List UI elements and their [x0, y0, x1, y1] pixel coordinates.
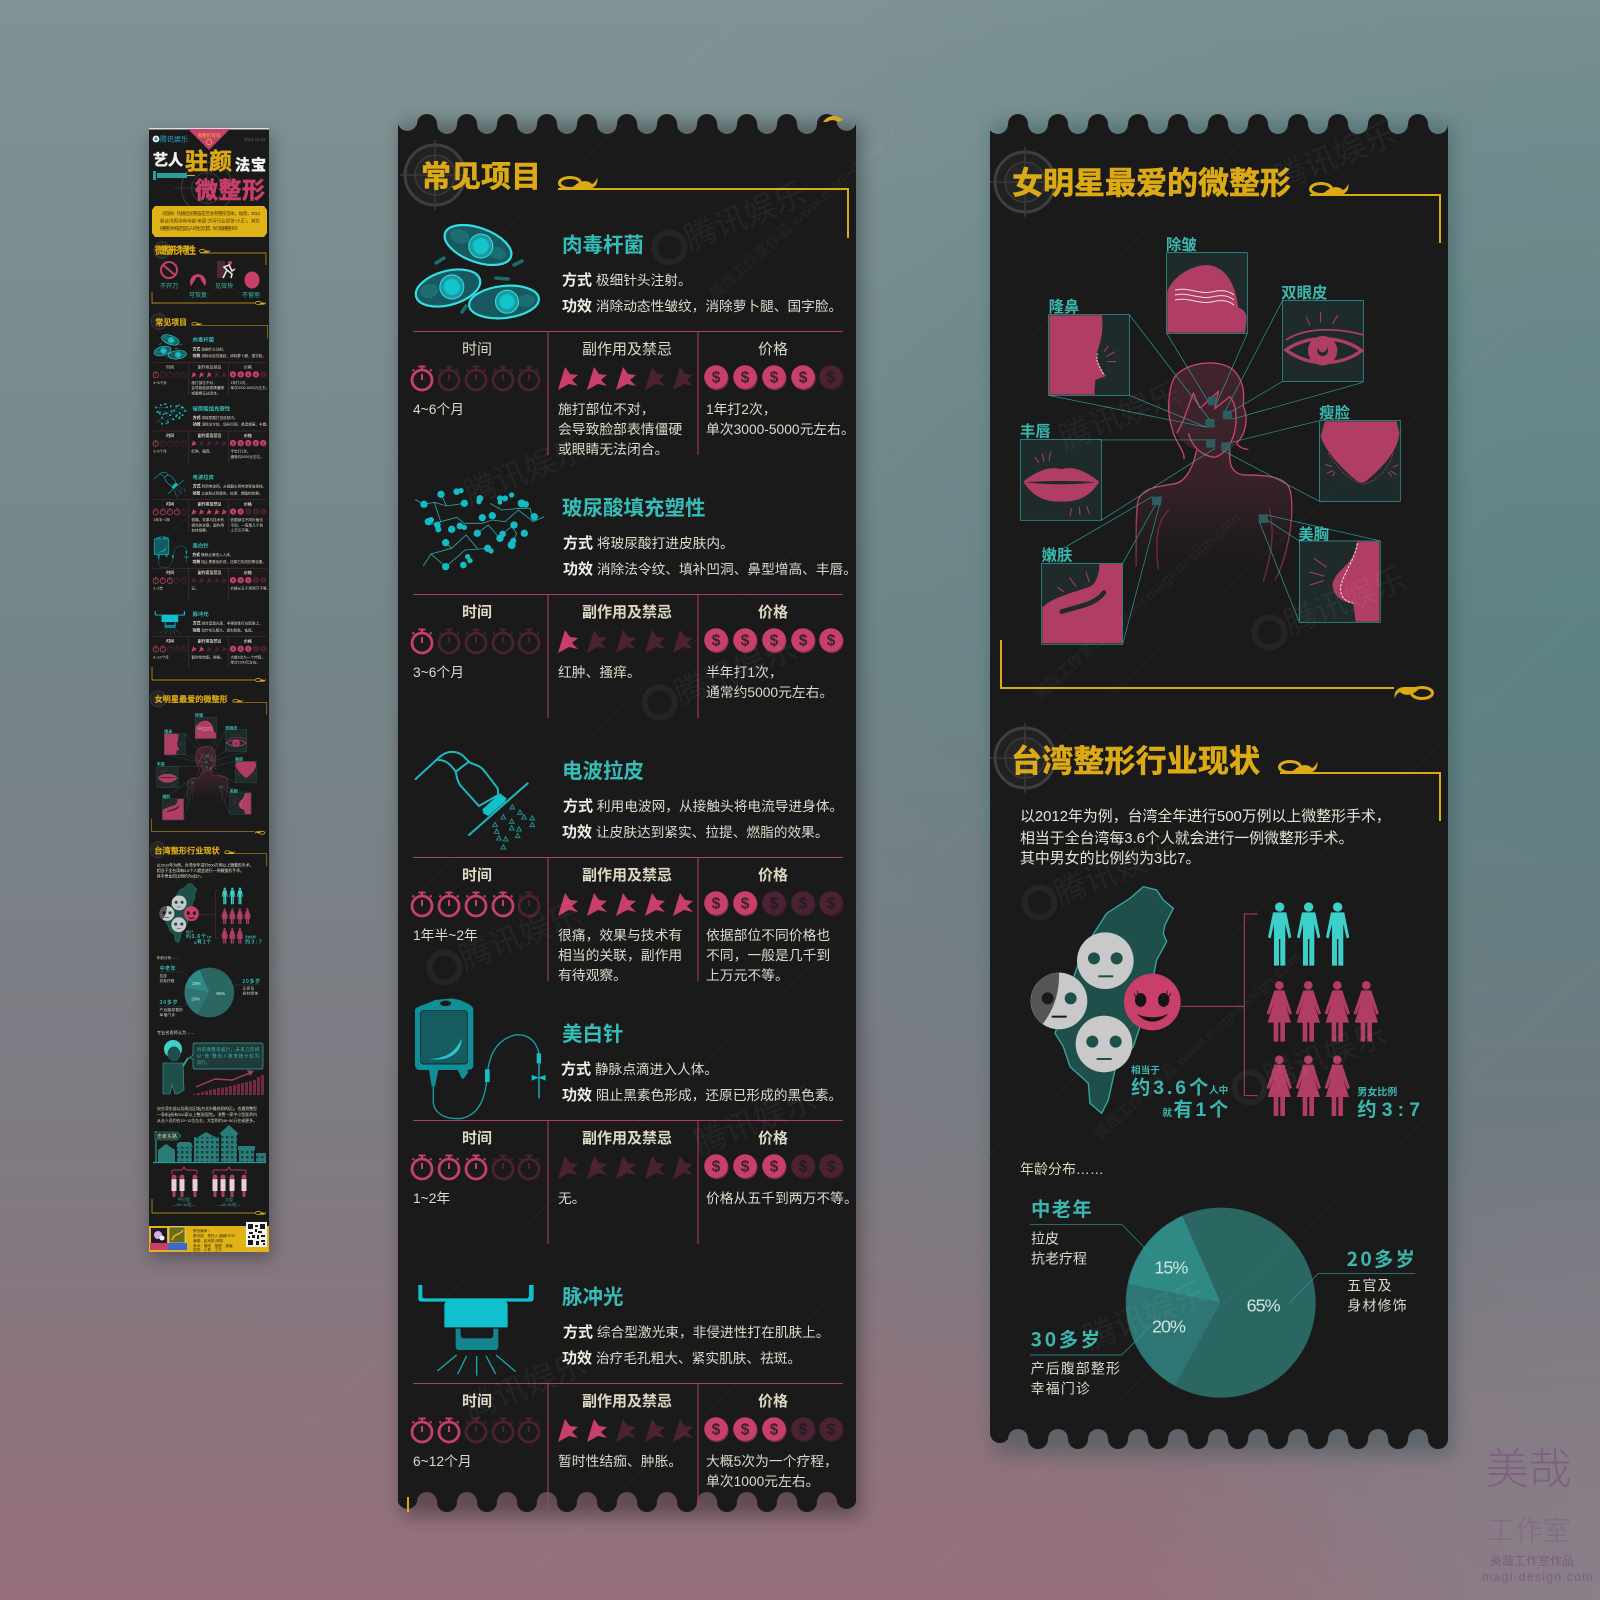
top-right ornament fragment: [823, 116, 843, 122]
rating table: 副作用及禁忌: [582, 1130, 672, 1147]
men row: [1268, 902, 1349, 966]
icon: radio wave handpiece: [416, 752, 535, 849]
heading: common treatments: 常见项目: [421, 152, 541, 196]
method and effect: 方式 将玻尿酸打进皮肤内。: [563, 534, 734, 552]
paragraph: [157, 1105, 257, 1123]
icon: no scar: 不留疤: [242, 291, 260, 299]
doctors groups: [172, 1167, 246, 1207]
face: neutral top: [1077, 932, 1134, 989]
intro box: [152, 206, 267, 237]
callout: wrinkles: 除皱: [1166, 233, 1197, 255]
icon: quick runner: [215, 261, 235, 290]
intro box: 新台湾再没有半路“美丽”方可行业更张“小王”。其实: [160, 218, 260, 224]
logo: 腾讯娱乐: [160, 134, 188, 144]
watermarks: 腾讯娱乐: [689, 1080, 821, 1161]
label: older: [1030, 1194, 1152, 1266]
heading: taiwan status: 台湾整形行业现状: [1011, 736, 1260, 781]
panel shadows: [151, 124, 1452, 1516]
callout: breast: 美胸: [1298, 522, 1329, 544]
rating table: 价格: [758, 1129, 788, 1147]
closing frame: features: [152, 292, 266, 305]
rating table: 时间: [462, 1130, 492, 1147]
stat: ratio: 男女比例: [1357, 1085, 1397, 1098]
callout: lips: [1020, 420, 1101, 520]
table rules: [413, 594, 843, 718]
doctors groups: 中小型: [178, 1196, 190, 1202]
main title: 微整形: [195, 171, 265, 205]
watermarks: 腾讯娱乐: [1054, 375, 1186, 456]
rating table: 时间: [462, 867, 492, 884]
rating table: 施打部位不对，: [558, 401, 655, 417]
rating table: 时间: [462, 341, 492, 358]
treatment: whitening injection: [412, 998, 858, 1244]
icon: no knife: [160, 262, 178, 290]
taiwan map and ratio: [1031, 887, 1420, 1121]
callout: skin rejuvenation: [1042, 544, 1123, 644]
watermarks: 腾讯娱乐: [1049, 830, 1181, 911]
women rows: [1267, 981, 1379, 1116]
rating table: 副作用及禁忌: [582, 604, 672, 621]
rating table: 通常约5000元左右。: [706, 685, 833, 700]
main title: 驻颜: [185, 142, 232, 176]
label: thirties: [1030, 1325, 1152, 1396]
rating table: 价格: [758, 1392, 788, 1410]
town illustration: [153, 1125, 266, 1162]
callout: skin rejuvenation: 嫩肤: [1042, 544, 1073, 566]
pie chart: 65%: [1247, 1295, 1281, 1315]
label: twenties: 五官及: [1347, 1278, 1392, 1294]
footer: 策划组 责任人 编辑ITEM: [193, 1233, 235, 1238]
panel: thumbnail long view: [149, 128, 270, 1252]
pie chart: 15%: [1154, 1257, 1188, 1277]
table rules: [413, 858, 843, 981]
method and effect: 方式 综合型激光束，非侵进性打在肌肤上。: [563, 1323, 830, 1341]
callout: double eyelid: [1281, 281, 1363, 381]
face: neutral bottom: [1076, 1016, 1132, 1072]
section heading: features: 微整形特性: [155, 242, 196, 257]
rating table: 上万元不等。: [706, 967, 789, 983]
face: half shaded: [1031, 973, 1087, 1029]
intro paragraph: [1020, 807, 1391, 867]
label: twenties: 身材修饰: [1347, 1298, 1407, 1314]
bottom frame fragment: [407, 1497, 409, 1512]
method and effect: 功效 治疗毛孔粗大、紧实肌肤、祛斑。: [562, 1349, 801, 1367]
rating table: 单次3000-5000元左右。: [706, 422, 855, 437]
chart: rising bars: [193, 1070, 264, 1095]
treatment: intense pulsed light: [412, 1280, 844, 1507]
callout: wrinkles: [1166, 233, 1247, 333]
doctors groups: —40~50位—: [217, 1201, 241, 1207]
intro paragraph: 以2012年为例，台湾全年进行500万例以上微整形手术，: [1020, 807, 1391, 825]
method and effect: 方式 极细针头注射。: [562, 271, 692, 289]
rating table: 很痛，效果与技术有: [558, 927, 682, 943]
rating table: 价格: [758, 341, 788, 358]
heading: common treatments: [400, 140, 848, 238]
rating table: 副作用及禁忌: [582, 341, 672, 358]
speech bubble: [189, 1043, 263, 1069]
speech bubble: 目前微整形盛行，未来几年将: [197, 1046, 260, 1053]
age heading: 年龄分布……: [1020, 1161, 1104, 1177]
studio signature: [1482, 1446, 1594, 1584]
icon: doctor: [163, 1040, 188, 1094]
rating table: 1年半~2年: [413, 928, 478, 943]
watermarks: 美哉工作室作品 www.magi-design.com: [1031, 508, 1244, 703]
footer: [149, 1222, 269, 1252]
method and effect: 功效 消除动态性皱纹，消除萝卜腿、国字脸。: [562, 297, 842, 315]
icon: recoverable: [189, 274, 207, 299]
doctors groups: 大型: [225, 1196, 233, 1202]
rating table: 1年打2次，: [706, 401, 777, 417]
rating table: 或眼睛无法闭合。: [558, 442, 668, 457]
method and effect: [561, 1060, 842, 1104]
icon: bacteria: [412, 217, 540, 322]
callout: lips: 丰唇: [1020, 420, 1051, 442]
item title: 电波拉皮: [562, 754, 644, 784]
face: smiling woman: [1124, 974, 1181, 1030]
stat: one in 3.6: 有1个: [1173, 1099, 1228, 1121]
stat: ratio: 约3:7: [1357, 1099, 1420, 1121]
watermarks: 腾讯娱乐: [459, 430, 591, 511]
item title: 美白针: [562, 1017, 624, 1047]
rating table: 单次1000元左右。: [706, 1474, 819, 1489]
icon: IV bag: [415, 998, 546, 1119]
stat: one in 3.6: 相当于: [1131, 1064, 1160, 1076]
studio signature: 美哉工作室作品: [1490, 1554, 1574, 1568]
rating table: 3~6个月: [413, 665, 464, 680]
method and effect: 功效 消除法令纹、填补凹洞、鼻型增高、丰唇。: [563, 560, 857, 578]
method and effect: 功效 阻止黑素色形成，还原已形成的黑色素。: [562, 1086, 842, 1104]
map of taiwan: [1055, 887, 1173, 1113]
paragraph: 仅台湾东部以及周边区域(台北市最热闹的区)，也遇到整型: [157, 1105, 257, 1111]
right panel contents: [990, 147, 1440, 1398]
watermarks: 美哉工作室作品 www.magi-design.com: [706, 108, 919, 303]
icon: no scar: [242, 272, 260, 299]
paragraph: 一条街(街有300家以上整形医院)，消费一家中小型医师内: [157, 1111, 257, 1117]
rating table: 暂时性结痂、肿胀。: [558, 1454, 682, 1469]
thumbnail: common treatments: [150, 313, 270, 669]
stat: ratio: [1357, 1085, 1420, 1121]
rating table: 时间: [462, 1393, 492, 1410]
rating table: 有待观察。: [558, 967, 627, 983]
watermarks: 腾讯娱乐: [459, 1345, 591, 1426]
footer: 策划编审：: [193, 1228, 211, 1233]
method and effect: [562, 271, 842, 315]
rating table: 时间: [462, 604, 492, 621]
watermarks: 美哉工作室作品 www.magi-design.com: [1091, 948, 1304, 1143]
watermarks: 腾讯娱乐: [679, 175, 811, 256]
heading: favourite procedures: 女明星最爱的微整形: [1012, 158, 1291, 203]
method and effect: 功效 让皮肤达到紧实、拉提、燃脂的效果。: [562, 823, 829, 841]
highlight squares: [1152, 397, 1268, 523]
section heading: features: [154, 242, 266, 265]
heading: taiwan status: [990, 723, 1440, 821]
panel: common treatments (tall ticket): [398, 114, 858, 1512]
icon: quick runner: 见效快: [215, 282, 233, 290]
callout: slim face: [1319, 401, 1400, 501]
rating table: 会导致脸部表情僵硬: [558, 422, 682, 437]
rating table: 4~6个月: [413, 402, 464, 417]
stat: one in 3.6: 约3.6个: [1131, 1077, 1208, 1099]
rating table: [412, 1392, 844, 1489]
rating table: 相当的关联，副作用: [558, 948, 682, 963]
town illustration: 忠孝东路: [157, 1133, 177, 1140]
item title: 玻尿酸填充塑性: [562, 491, 706, 521]
intro paragraph: 其中男女的比例约为3比7。: [1020, 849, 1200, 867]
pink top tag: 微整形资讯: [198, 132, 221, 139]
rating table: [412, 341, 855, 457]
intro paragraph: 相当于全台湾每3.6个人就会进行一例微整形手术。: [1020, 829, 1353, 847]
rating table: [412, 1129, 858, 1206]
rating table: 依据部位不同价格也: [706, 928, 830, 943]
rating table: [412, 866, 844, 983]
label: thirties: 30多岁: [1031, 1325, 1100, 1353]
woman silhouette: [1136, 363, 1292, 587]
icon: IPL device: [418, 1285, 534, 1376]
table rules: [413, 1120, 843, 1244]
panel: favourite procedures and taiwan status: [990, 114, 1448, 1449]
rating table: 价格: [758, 866, 788, 884]
main title: 艺人: [153, 149, 183, 170]
rating table: 1~2年: [413, 1191, 450, 1206]
footer: 编辑：起司奶 阿翔: [193, 1238, 223, 1243]
studio signature: 美哉: [1486, 1446, 1571, 1494]
footer: 美术：猫咪 插图 美编: [193, 1243, 233, 1248]
label: older: 抗老疗程: [1031, 1250, 1087, 1266]
label: thirties: 幸福门诊: [1031, 1380, 1090, 1396]
rating table: 价格从五千到两万不等。: [706, 1190, 858, 1206]
watermarks: 腾讯娱乐: [1079, 1275, 1211, 1356]
rating table: 红肿、搔痒。: [558, 665, 641, 680]
table rules: [413, 332, 843, 455]
speech bubble: 以“美”整形人数来统计较为: [197, 1052, 259, 1060]
intro box: 微整形手术是否是与人的生活习惯，你了解微整形吗？: [160, 225, 240, 232]
pie chart: 20%: [1152, 1317, 1186, 1337]
pie chart section: [1020, 1161, 1415, 1398]
label: twenties: [1289, 1244, 1415, 1314]
logo: 2013-12-13: [244, 137, 266, 142]
rating table: 6~12个月: [413, 1454, 472, 1469]
thumbnail: stars and taiwan sections: [149, 690, 267, 1017]
heading: favourite procedures: [990, 147, 1440, 243]
method and effect: [562, 1323, 830, 1367]
callout: slim face: 瘦脸: [1319, 401, 1351, 423]
watermarks: 腾讯娱乐: [454, 895, 586, 976]
stat: one in 3.6: [1131, 1064, 1228, 1121]
item title: 脉冲光: [562, 1280, 624, 1310]
watermarks: 腾讯娱乐: [1269, 115, 1401, 196]
speech bubble: 流行。: [197, 1059, 210, 1066]
callout: double eyelid: 双眼皮: [1281, 281, 1327, 303]
watermarks: 腾讯娱乐: [669, 630, 801, 711]
rating table: 副作用及禁忌: [582, 1393, 672, 1410]
pie chart: [1126, 1208, 1316, 1398]
body diagram: [1020, 233, 1400, 644]
icon: molecule network: [415, 488, 544, 570]
studio signature: magi-design.com: [1482, 1570, 1594, 1584]
treatment: radio wave: [412, 752, 844, 983]
label: thirties: 产后腹部整形: [1031, 1360, 1120, 1376]
treatment: botulinum toxin: [412, 217, 855, 457]
treatment: hyaluronic acid: [412, 488, 857, 718]
connector bracket: [1181, 914, 1258, 1096]
rating table: 大概5次为一个疗程，: [706, 1454, 838, 1469]
method and effect: [562, 797, 843, 841]
rating table: [412, 603, 844, 700]
stat: one in 3.6: 人中: [1209, 1084, 1228, 1096]
item title: 肉毒杆菌: [562, 228, 644, 258]
icon: no knife: 不开刀: [160, 283, 178, 290]
pink top tag: [188, 129, 230, 150]
rating table: 价格: [758, 603, 788, 621]
watermarks: 腾讯娱乐: [1259, 1015, 1391, 1096]
callout: nose: [1049, 295, 1129, 395]
callout lines: [1049, 300, 1380, 644]
icon: recoverable: 可恢复: [189, 291, 207, 299]
intro box: 《陷阱》热播后加整容是否会有整形范本。据悉，2013: [160, 210, 260, 217]
studio signature: 工作室: [1487, 1515, 1571, 1546]
rating table: 无。: [558, 1191, 586, 1206]
syringe: [153, 171, 195, 180]
rating table: 副作用及禁忌: [582, 867, 672, 884]
label: twenties: 20多岁: [1347, 1244, 1415, 1272]
closing frame: [1001, 640, 1432, 699]
crosshair: [175, 156, 239, 220]
doctor opinion heading: 专业名医师认为……: [157, 1029, 195, 1036]
paragraph: 从业人员约在10~12位左右，大型则约40~50万在或更多。: [157, 1117, 257, 1123]
footer: 视觉：小青 工作: [193, 1247, 222, 1252]
rating table: 不同，一般是几千到: [706, 948, 830, 963]
label: older: 中老年: [1031, 1194, 1092, 1222]
main title: [153, 142, 266, 205]
closing frame: treatments: [152, 667, 266, 682]
closing frame: taiwan: [152, 1199, 266, 1215]
rating table: 半年打1次，: [706, 664, 783, 680]
callout: nose: 隆鼻: [1049, 295, 1079, 317]
stat: one in 3.6: 就: [1162, 1107, 1172, 1119]
watermarks: 腾讯娱乐: [1279, 560, 1411, 641]
method and effect: [563, 534, 857, 578]
logo: [153, 134, 266, 144]
method and effect: 方式 静脉点滴进入人体。: [561, 1060, 718, 1078]
main title: 法宝: [235, 154, 266, 175]
callout: breast: [1298, 522, 1380, 622]
doctors groups: —10~12位—: [172, 1201, 196, 1207]
table rules: [413, 1384, 843, 1507]
label: older: 拉皮: [1031, 1230, 1059, 1246]
method and effect: 方式 利用电波网，从接触头将电流导进身体。: [563, 797, 843, 815]
